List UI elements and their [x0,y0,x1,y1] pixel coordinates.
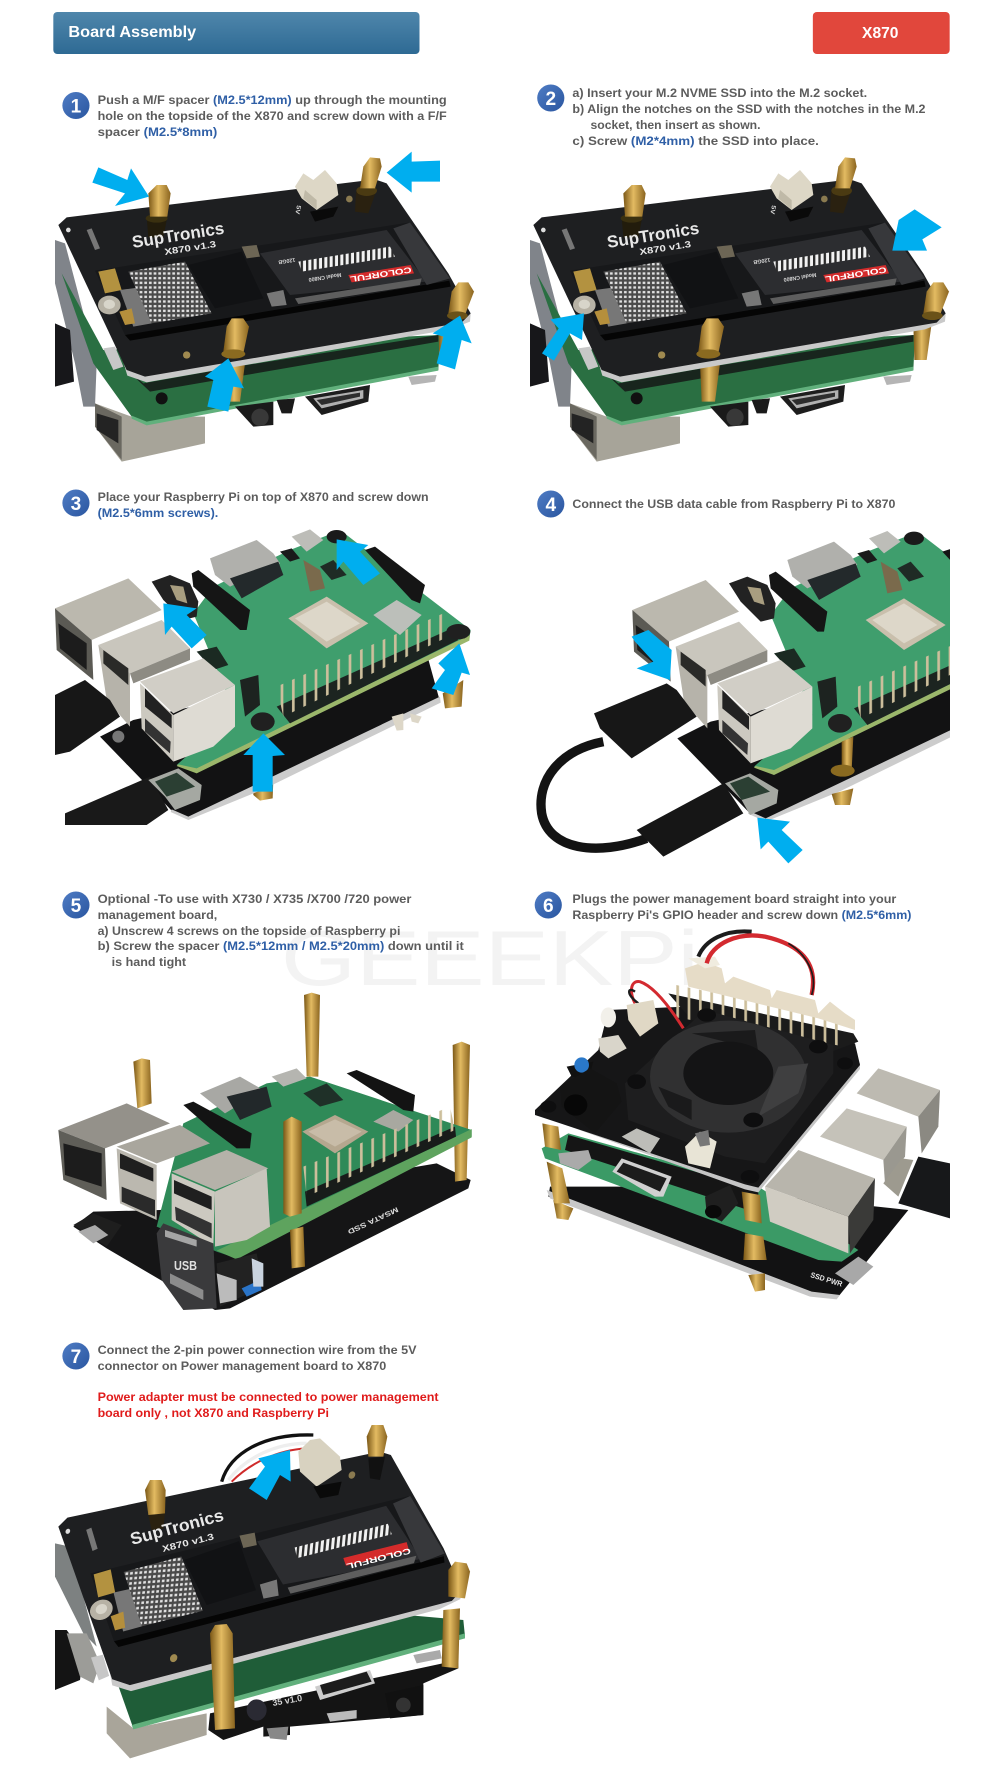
warning text [98,1390,439,1420]
step 6 text [535,892,911,922]
board labels: 5V [293,205,301,215]
step 7 text [62,1342,439,1420]
photo 2: SSD insertion [530,157,949,462]
board labels: USB [174,1258,197,1273]
step 6 text: Raspberry Pi's GPIO header and screw down (M2.5*6mm) [572,908,911,922]
board labels: SupTronics [128,1506,226,1549]
header: X870 [813,12,950,54]
step 1 text: spacer (M2.5*8mm) [98,125,217,139]
step 2 text: c) Screw (M2*4mm) the SSD into place. [572,134,819,148]
board labels: SupTronics [131,219,225,252]
number badge 5: 5 [71,896,82,917]
board labels: 120GB [753,256,771,265]
number badge 7 [62,1342,90,1370]
step 1 text: Push a M/F spacer (M2.5*12mm) up through the mounting [98,93,447,107]
step 3 text [62,490,429,520]
step 7 text: Connect the 2-pin power connection wire from the 5V [98,1343,416,1357]
step 6 text: Plugs the power management board straight into your [572,892,897,906]
USB cable [55,680,120,755]
header: Board Assembly: Board Assembly [68,24,197,41]
step 2 text: socket, then insert as shown. [591,118,761,132]
board labels: X870 v1.3 [161,1531,215,1554]
board labels: Model CN800 [308,271,342,282]
step 5 text: b) Screw the spacer (M2.5*12mm / M2.5*20mm) down until it [98,939,464,953]
photo 4: USB data cable [541,531,1000,863]
warning text: board only , not X870 and Raspberry Pi [98,1406,329,1420]
number badge 1: 1 [71,97,82,117]
board labels: COLORFUL [824,265,887,284]
fan [625,1010,833,1163]
board labels [131,205,412,284]
number badge 2: 2 [545,89,556,110]
arrow: screw left [163,603,207,648]
arrow: screw front [243,733,285,792]
step 2 text [537,84,926,148]
step 2 text: b) Align the notches on the SSD with the notches in the M.2 [572,102,926,116]
board label: SSD PWR [809,1270,844,1289]
arrow: screw top [337,539,380,585]
board labels [128,1506,412,1708]
number badge 3: 3 [71,494,81,515]
step 3 text: Place your Raspberry Pi on top of X870 and screw down [98,490,429,504]
step 5 text [62,892,464,969]
spacer [831,737,855,805]
ethernet port [765,1150,875,1253]
photo 3: Raspberry Pi on X870 [55,529,471,825]
number badge 5 [62,892,90,918]
number badge 4: 4 [545,495,557,516]
number badge 2 [537,84,564,112]
USB connector [157,1223,217,1310]
5V connector [298,1438,342,1498]
step 3 text: (M2.5*6mm screws). [98,506,218,520]
step 5 text: is hand tight [112,955,186,969]
green board [542,1133,858,1262]
wires [629,931,813,1028]
watermark: GEEEKPi [281,914,699,1002]
step 2 text: a) Insert your M.2 NVME SSD into the M.2 socket. [572,86,867,100]
board labels [606,205,887,284]
step 4 text [537,490,896,518]
board labels: 5V [768,205,776,215]
arrow: spacer rear left [92,167,149,206]
step 1 text [62,92,447,139]
photo 1: X870 with spacers [55,152,474,462]
blue connector [217,1253,263,1307]
board labels: COLORFUL [349,265,412,284]
board labels [174,1205,399,1273]
power wire [222,1435,313,1482]
number badge 6: 6 [543,896,554,917]
board labels: X870 v1.3 [164,239,217,257]
warning text: Power adapter must be connected to power management [98,1390,439,1404]
number badge 3 [62,490,90,516]
board labels: X870 v1.3 [639,239,692,257]
number badge 4 [537,490,564,518]
number badge 1 [62,92,90,119]
arrow: 5V connector [249,1450,291,1500]
board labels: 120GB [278,256,296,265]
arrow: spacer rear right [387,152,440,193]
step 5 text: a) Unscrew 4 screws on the topside of Raspberry pi [98,924,400,938]
arrow: USB port on Pi [632,630,672,680]
step 5 text: Optional -To use with X730 / X735 /X700 /720 power [98,892,412,906]
bottom board [548,1187,908,1297]
step 7 text: connector on Power management board to X870 [98,1359,387,1373]
arrow: SSD screw [542,313,584,361]
number badge 7: 7 [71,1347,81,1368]
USB cable [898,1157,950,1218]
spacers [542,1123,561,1150]
arrow: M.2 socket [892,209,942,251]
board labels: MSATA SSD [346,1205,399,1235]
arrow: spacer right [433,316,472,369]
arrow: screw right [432,643,470,695]
header: X870: X870 [862,25,898,42]
step 5 text: management board, [98,908,217,922]
photo 7: power wire connection [43,1425,475,1758]
board labels: SupTronics [606,219,700,252]
arrow: spacer front [205,358,244,412]
step 4 text: Connect the USB data cable from Raspberry Pi to X870 [572,497,896,511]
board labels: Model CN800 [783,271,817,282]
photo 5: Pi with tall spacers [58,993,472,1310]
arrow: USB port on X870 [757,818,803,863]
header: Board Assembly [53,12,420,54]
board labels: COLORFUL [345,1546,412,1571]
photo 6: power management board with fan [535,931,950,1299]
white connectors [685,962,855,1030]
number badge 6 [535,892,562,918]
board labels: 35 v1.0 [272,1693,303,1708]
USB ports [820,1068,940,1197]
top board [535,1063,860,1192]
USB cable loop [541,683,778,857]
step 1 text: hole on the topside of the X870 and screw down with a F/F [98,109,447,123]
